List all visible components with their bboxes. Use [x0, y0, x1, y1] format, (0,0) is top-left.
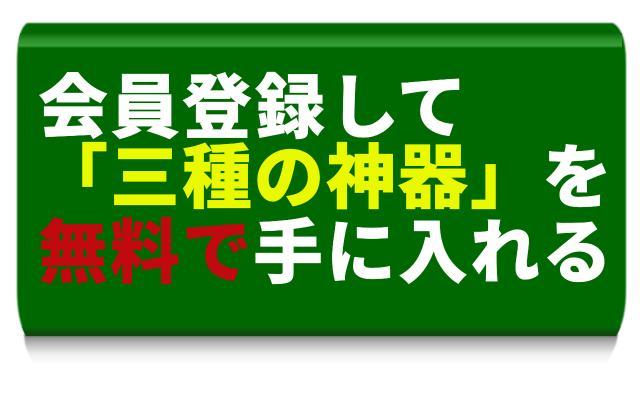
button shadow: [24, 334, 618, 364]
heading line 2: [38, 139, 612, 217]
button body: [17, 23, 626, 336]
heading line 1: 会員登録して: [38, 69, 467, 147]
bracketed phrase: 「三種の神器」: [38, 139, 540, 217]
particle: を: [542, 139, 612, 217]
heading line 3: [38, 214, 612, 292]
obtain label: 手に入れる: [253, 214, 612, 292]
button bevel: [17, 33, 627, 337]
free label: 無料で: [38, 214, 252, 292]
